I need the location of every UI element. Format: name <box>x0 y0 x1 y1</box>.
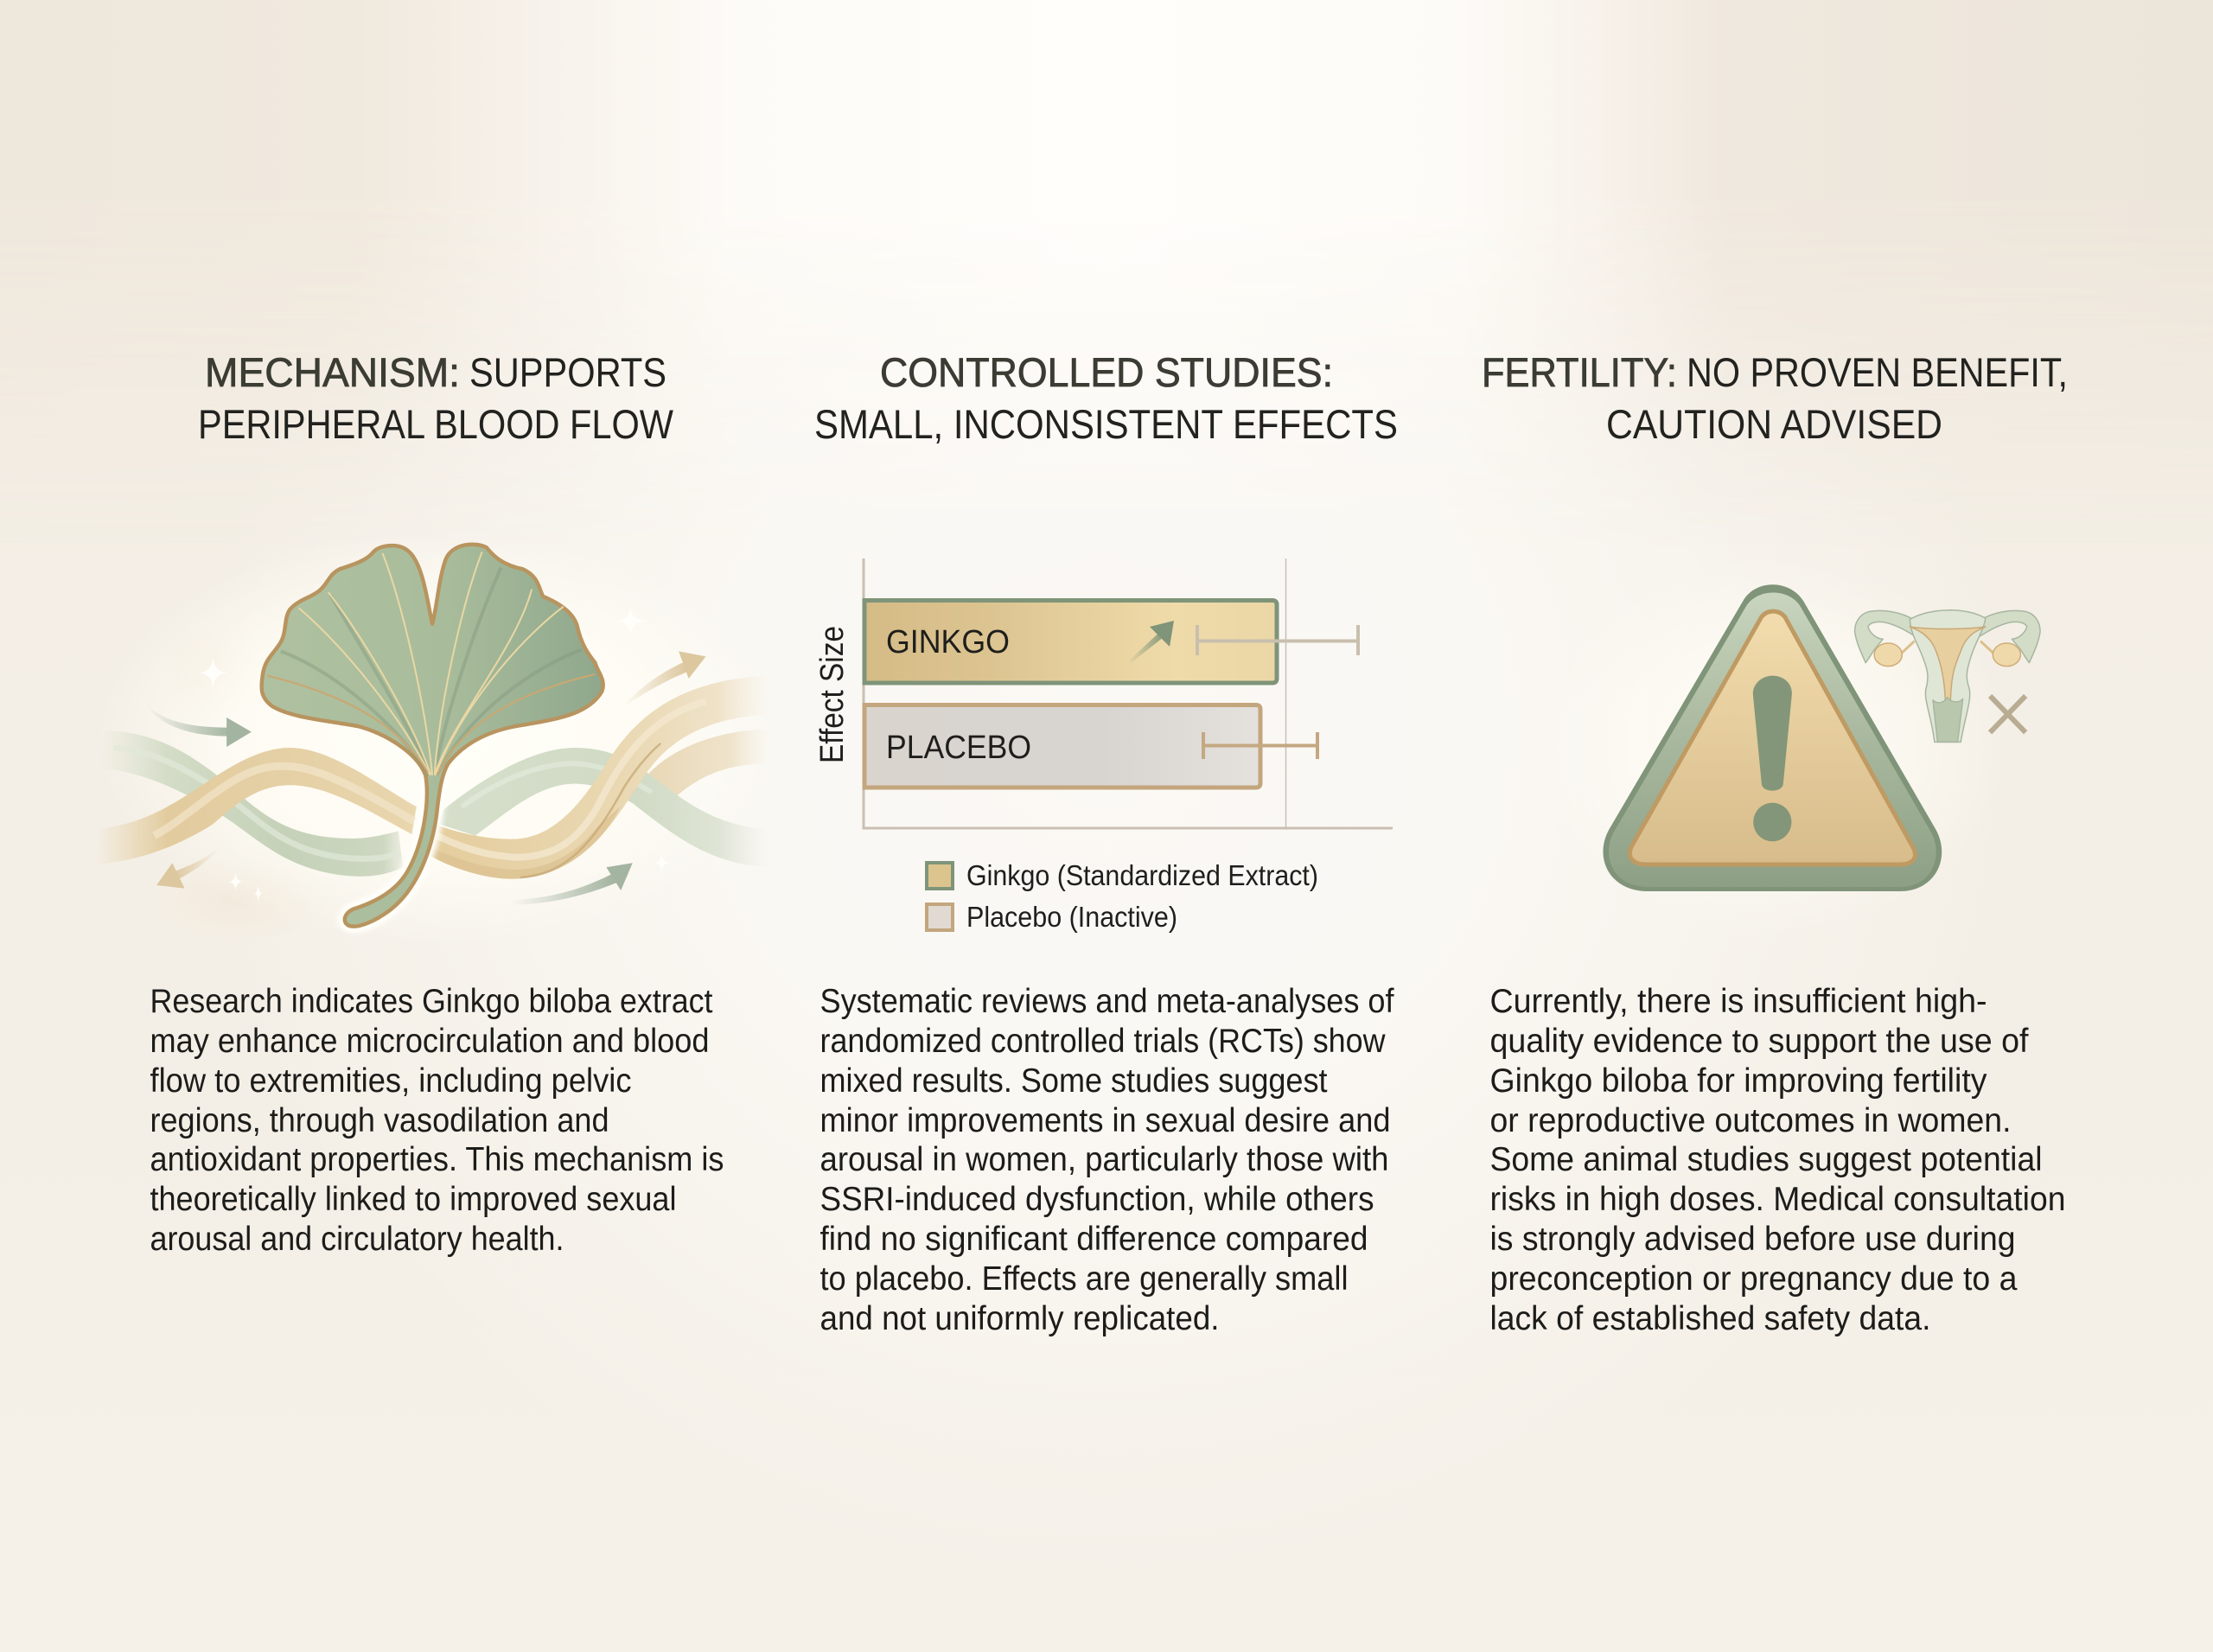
heading: controlled studies: SMALL, INCONSISTENT EFFECTS <box>814 401 1398 447</box>
icon: reproductive system <box>1855 610 2040 742</box>
heading: mechanism <box>198 349 674 447</box>
heading: controlled studies: CONTROLLED STUDIES: <box>880 349 1333 395</box>
heading: mechanism: PERIPHERAL BLOOD FLOW <box>198 401 674 447</box>
bar: ginkgo: GINKGO <box>886 624 1010 660</box>
arrow: tan upper right <box>622 651 706 707</box>
body text: fertility: or reproductive outcomes in women. <box>1490 1102 2011 1139</box>
body text: fertility: preconception or pregnancy due to a <box>1490 1260 2018 1298</box>
bar: placebo <box>864 705 1260 788</box>
y axis label: Effect Size <box>814 626 851 763</box>
body text: controlled studies: mixed results. Some studies suggest <box>820 1062 1328 1100</box>
body text: fertility: Some animal studies suggest potential <box>1490 1141 2042 1178</box>
ribbon: tan right <box>425 676 769 879</box>
body text: controlled studies: Systematic reviews and meta-analyses of <box>820 983 1394 1020</box>
body text: controlled studies: SSRI-induced dysfunction, while others <box>820 1181 1374 1218</box>
body text: fertility <box>1490 983 2066 1337</box>
error bar: placebo <box>1203 732 1317 759</box>
sparkles <box>197 605 671 905</box>
body text: fertility: is strongly advised before use during <box>1490 1221 2016 1258</box>
body text: mechanism: theoretically linked to improved sexual <box>150 1181 676 1218</box>
body text: mechanism: regions, through vasodilation and <box>150 1102 609 1139</box>
error bar: ginkgo <box>1197 625 1358 655</box>
ribbon: green left <box>100 730 403 877</box>
body text: mechanism: Research indicates Ginkgo biloba extract <box>150 983 713 1020</box>
bar chart: effect size <box>814 558 1393 933</box>
body text: fertility: Ginkgo biloba for improving fertility <box>1490 1062 1987 1100</box>
body text: mechanism: antioxidant properties. This mechanism is <box>150 1141 724 1178</box>
heading: mechanism: MECHANISM: <box>205 349 460 395</box>
bar: placebo: PLACEBO <box>886 730 1031 766</box>
arrow: green left <box>145 703 252 747</box>
heading: fertility: CAUTION ADVISED <box>1606 401 1942 447</box>
arrow: green lower right <box>512 863 633 905</box>
legend: Ginkgo (Standardized Extract) <box>966 859 1318 891</box>
soft glow <box>1538 556 2007 936</box>
body text: controlled studies: and not uniformly replicated. <box>820 1300 1219 1337</box>
illustration: warning triangle and reproductive system <box>1538 556 2040 936</box>
heading: fertility: FERTILITY: <box>1482 349 1677 395</box>
illustration: ginkgo leaf with flowing ribbons <box>95 530 782 945</box>
leaf <box>262 545 603 927</box>
ribbon: tan left <box>95 748 417 864</box>
ribbon: back tan strand <box>647 729 769 807</box>
body text: controlled studies: randomized controlled trials (RCTs) show <box>820 1023 1386 1060</box>
heading: mechanism: SUPPORTS <box>469 349 666 395</box>
body text: fertility: Currently, there is insufficient high- <box>1490 983 1987 1020</box>
body text: controlled studies: minor improvements in sexual desire and <box>820 1102 1390 1139</box>
legend <box>927 859 1318 933</box>
body text: controlled studies: to placebo. Effects are generally small <box>820 1260 1349 1298</box>
arrow: tan lower left <box>156 847 220 889</box>
body text: mechanism <box>150 983 724 1258</box>
warm halo <box>163 625 263 724</box>
body text: fertility: lack of established safety data. <box>1490 1300 1931 1337</box>
exclamation mark <box>1753 676 1792 841</box>
ribbon: green right <box>439 748 769 867</box>
bar: ginkgo <box>864 600 1277 683</box>
body text: fertility: quality evidence to support the use of <box>1490 1023 2029 1060</box>
heading: controlled studies <box>814 349 1398 447</box>
heading: fertility <box>1482 349 2068 447</box>
panel: mechanism <box>95 349 782 1258</box>
axes <box>864 558 1393 828</box>
legend: Placebo (Inactive) <box>966 901 1177 933</box>
panel: fertility <box>1482 349 2068 1337</box>
warning triangle <box>1603 584 1942 891</box>
icon: x mark <box>1990 696 2025 732</box>
body text: mechanism: arousal and circulatory health. <box>150 1221 564 1258</box>
body text: controlled studies <box>820 983 1394 1337</box>
body text: controlled studies: find no significant difference compared <box>820 1221 1368 1258</box>
heading: fertility: NO PROVEN BENEFIT, <box>1687 349 2068 395</box>
arrow: up trend <box>1128 621 1174 663</box>
body text: mechanism: may enhance microcirculation and blood <box>150 1023 709 1060</box>
panel: controlled studies <box>814 349 1398 1337</box>
body text: controlled studies: arousal in women, particularly those with <box>820 1141 1388 1178</box>
body text: fertility: risks in high doses. Medical consultation <box>1490 1181 2066 1218</box>
body text: mechanism: flow to extremities, including pelvic <box>150 1062 631 1100</box>
